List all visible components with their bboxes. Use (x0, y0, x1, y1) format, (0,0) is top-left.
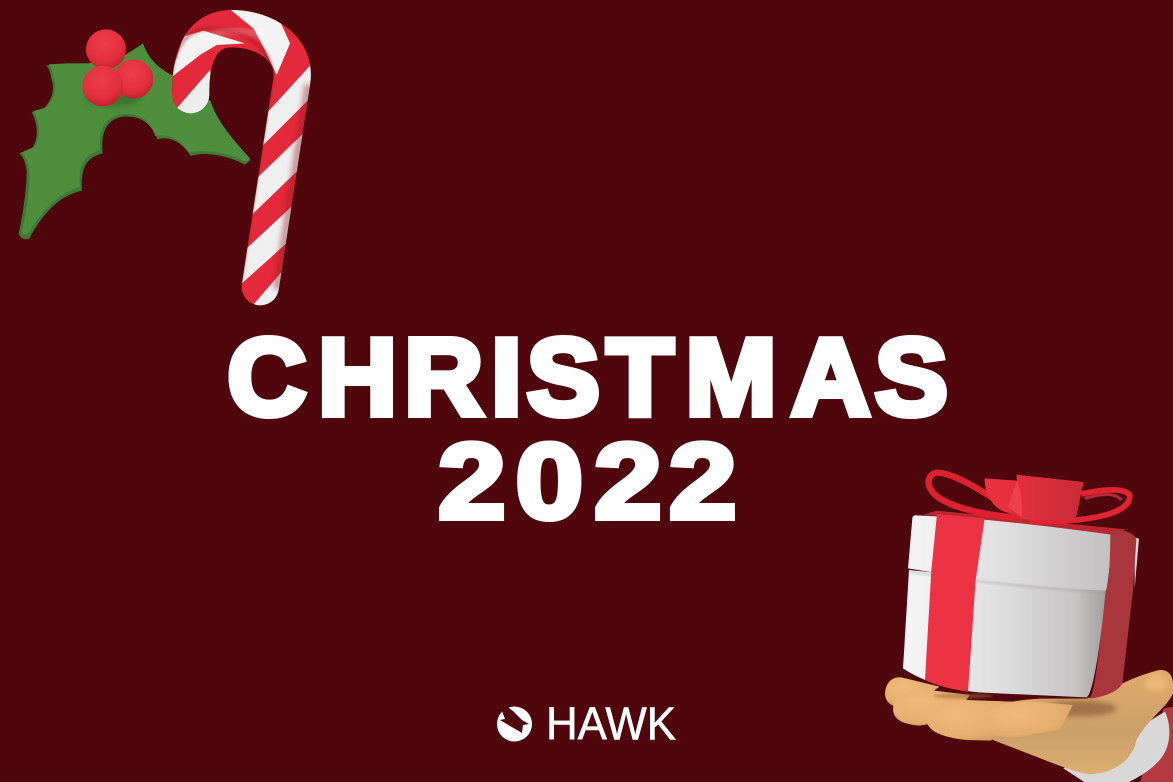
ribbon: right side (1090, 530, 1139, 699)
logo wordmark: HAWK (546, 698, 676, 750)
ribbon: top band (923, 511, 1126, 535)
logo: Hawk (497, 698, 676, 750)
icon: holly leaf with berries (19, 29, 251, 239)
shadow under box on palm (1043, 700, 1116, 716)
finger four (984, 701, 1073, 737)
ribbon: front (925, 514, 985, 692)
lid shadow (909, 572, 1105, 592)
finger two (893, 690, 970, 726)
gift box lid (908, 515, 1111, 591)
title (228, 316, 948, 541)
title line 1: CHRISTMAS (228, 316, 948, 438)
palm (985, 670, 1173, 774)
title line 2: 2022 (438, 422, 736, 541)
holly leaf (19, 43, 251, 239)
berries (82, 29, 153, 106)
logo bird icon (497, 703, 532, 742)
hand (885, 670, 1173, 774)
bow left loop (929, 473, 1023, 518)
gift box body (903, 570, 1106, 697)
back finger (885, 677, 940, 706)
sleeve and cuff (1063, 707, 1173, 782)
finger three (926, 700, 1013, 741)
gift bow (929, 473, 1130, 521)
icon: candy cane (172, 10, 311, 306)
bow knot (985, 475, 1084, 520)
icon: gift on hand (885, 473, 1173, 782)
bow right loop (1030, 490, 1130, 521)
